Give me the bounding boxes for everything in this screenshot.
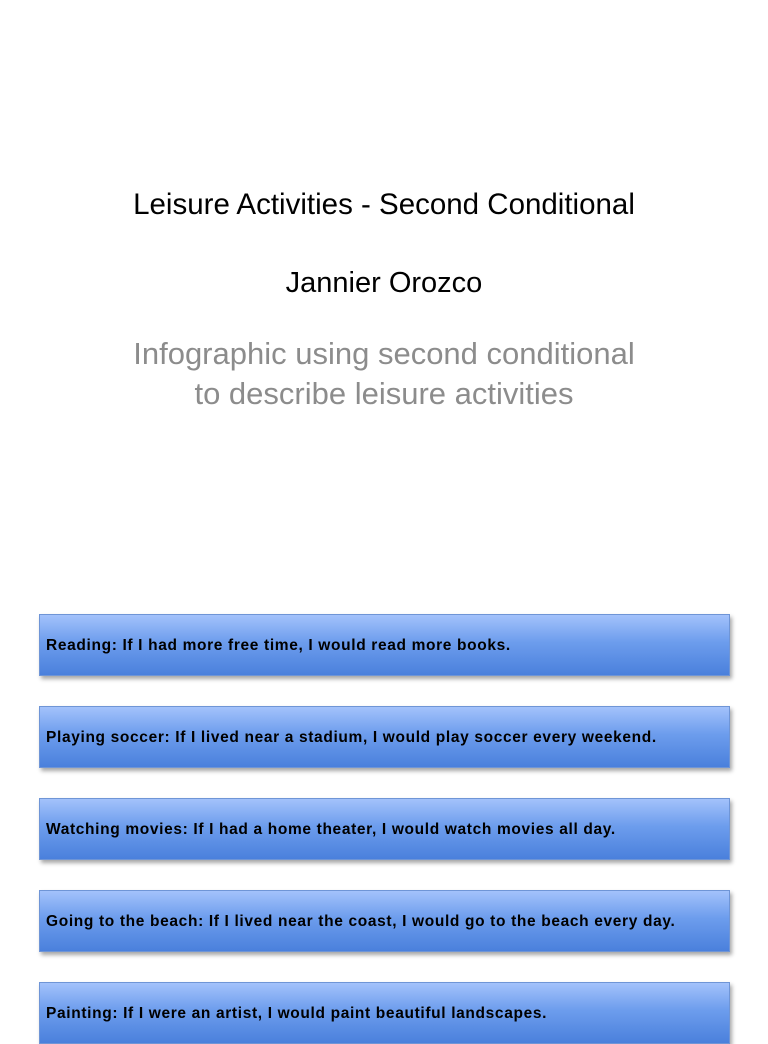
box: movies: Watching movies: If I had a home theater, I would watch movies all day. [46, 821, 616, 838]
box: painting: Painting: If I were an artist, I would paint beautiful landscapes. [46, 1005, 547, 1022]
box: movies [39, 798, 730, 860]
box: beach [39, 890, 730, 952]
box: soccer [39, 706, 730, 768]
box: reading [39, 614, 730, 676]
subtitle: Infographic using second conditional [133, 336, 635, 371]
box: soccer: Playing soccer: If I lived near a stadium, I would play soccer every weekend. [46, 729, 657, 746]
box: reading: Reading: If I had more free time, I would read more books. [46, 637, 511, 654]
author: Jannier Orozco [286, 267, 482, 299]
title: Leisure Activities - Second Conditional [133, 188, 635, 221]
box: painting [39, 982, 730, 1044]
box: beach: Going to the beach: If I lived near the coast, I would go to the beach every day. [46, 913, 675, 930]
subtitle: to describe leisure activities [194, 376, 574, 411]
subtitle [133, 336, 635, 411]
